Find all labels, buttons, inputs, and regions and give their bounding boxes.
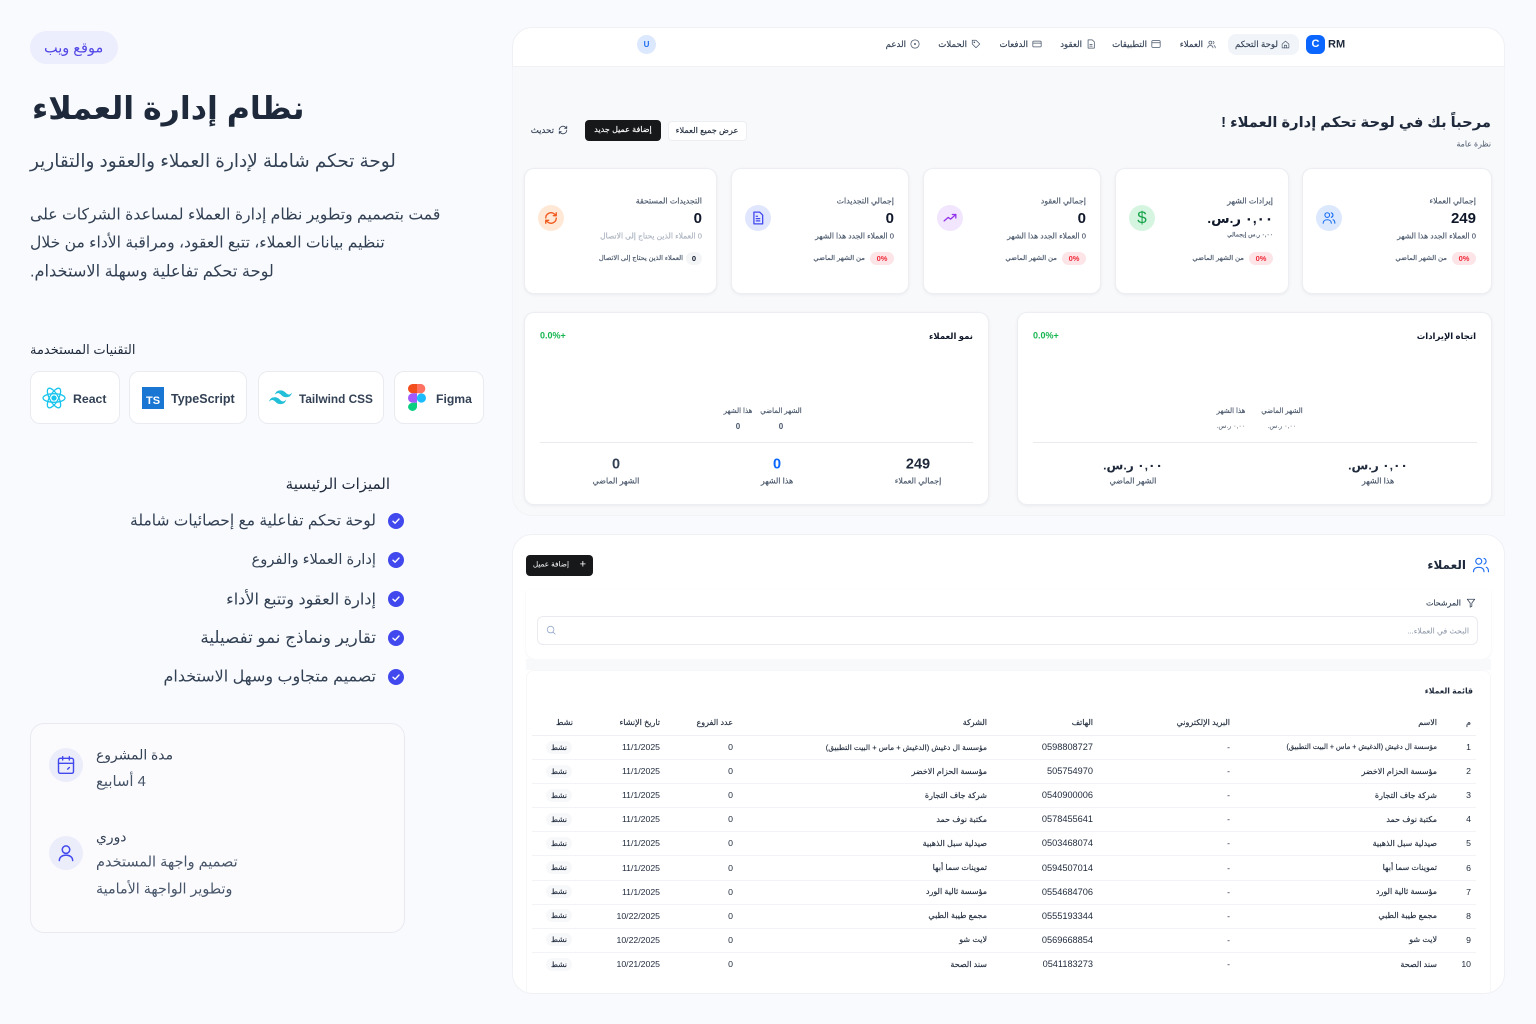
mini label: this month: هذا الشهر (1217, 408, 1245, 415)
mini value: last month: 0 (779, 422, 783, 431)
user avatar (637, 35, 656, 54)
icon: contract (1088, 40, 1095, 48)
change pill: 0% (1459, 254, 1469, 263)
nav: contracts: العقود (1060, 39, 1082, 49)
title: نظام إدارة العملاء (32, 90, 305, 126)
badge: website (30, 31, 118, 64)
feature 2 check (388, 552, 404, 568)
role label: دوري (96, 829, 126, 845)
filters card (526, 590, 1491, 659)
change pill (1452, 252, 1476, 265)
clients table: 0 (728, 766, 733, 776)
subtitle: لوحة تحكم شاملة لإدارة العملاء والعقود والتقارير (30, 150, 396, 171)
feature 4 check (388, 630, 404, 646)
mini label: this month: هذا الشهر (724, 408, 752, 415)
clients table: 0 (728, 863, 733, 873)
clients table: - (1227, 742, 1230, 752)
clients table: 0 (728, 790, 733, 800)
tech chip: Figma (394, 371, 484, 424)
feature 1 check (388, 513, 404, 529)
clients table: مؤسسة الحزام الاخضر (912, 767, 987, 776)
clients table: مؤسسة ثالية الورد (926, 887, 987, 896)
button: add client: إضافة عميل (533, 560, 569, 569)
feature 2: إدارة العملاء والفروع (252, 552, 376, 568)
clients table: - (1227, 911, 1230, 921)
feature 1: لوحة تحكم تفاعلية مع إحصائيات شاملة (130, 513, 376, 530)
note: العملاء الذين يحتاج إلى الاتصال (599, 255, 683, 262)
clients table: 0541183273 (1043, 959, 1093, 969)
clients table: 11/1/2025 (622, 887, 660, 897)
mini label: last month: الشهر الماضي (760, 408, 802, 415)
clients table: مؤسسة ال دغيش (الدغيش + ماس + البيت التطبيق) (826, 743, 987, 752)
clients table: تاريخ الإنشاء (620, 718, 660, 727)
this month value: 0 (773, 456, 781, 472)
clients table: تموينات سما أبها (933, 863, 987, 872)
clients table: 0569668854 (1042, 935, 1093, 945)
icon: TypeScript (142, 387, 164, 409)
clients table: نشط (551, 743, 567, 752)
search field (537, 616, 1478, 645)
nav: clients: العملاء (1180, 39, 1203, 49)
mini value: this month: 0 (736, 422, 740, 431)
chart card: revenue trend (1017, 312, 1492, 505)
icon: Figma (408, 384, 426, 411)
nav: payments: الدفعات (1000, 39, 1028, 49)
icon: filter (1466, 598, 1476, 608)
icon: dollar: $ (1137, 208, 1147, 227)
feature 3: إدارة العقود وتتبع الأداء (226, 590, 376, 608)
clients table: - (1227, 814, 1230, 824)
clients table: 11/1/2025 (622, 790, 660, 800)
heading: main features: الميزات الرئيسية (286, 476, 390, 493)
clients table: 0578455641 (1042, 814, 1093, 824)
clients table: - (1227, 766, 1230, 776)
change note: من الشهر الماضي (813, 255, 865, 262)
gap strip (526, 659, 1491, 670)
divider (1033, 442, 1477, 443)
clients table: 0 (728, 887, 733, 897)
clients table: الشركة (963, 718, 987, 727)
detail: 0 العملاء الجدد هذا الشهر (815, 231, 894, 240)
change note: من الشهر الماضي (1005, 255, 1057, 262)
panel: dashboard screenshot (512, 27, 1505, 516)
clients table: م (1466, 718, 1471, 727)
clients table: نشط (551, 960, 567, 969)
stat card: total renewals (731, 168, 909, 294)
description text (30, 207, 440, 280)
clients table: عدد الفروع (696, 718, 733, 727)
active nav pill (1228, 34, 1299, 55)
panel: project info (30, 723, 405, 933)
detail: 0 العملاء الجدد هذا الشهر (1007, 231, 1086, 240)
last month label: الشهر الماضي (593, 476, 639, 485)
tech chip: TypeScript: TypeScript (171, 392, 235, 406)
mini value: this month: ٠,٠٠ ر.س. (1217, 423, 1245, 430)
icon: dollar (1129, 205, 1155, 231)
clients table: نشط (556, 718, 573, 727)
icon: calendar (49, 748, 83, 782)
clients table: 0 (728, 959, 733, 969)
tech chip: React (30, 371, 120, 424)
icon: tag (972, 40, 980, 48)
clients table: 11/1/2025 (622, 863, 660, 873)
clients table: سند الصحة (1400, 960, 1437, 969)
clients table: 0 (728, 838, 733, 848)
clients table: 11/1/2025 (622, 814, 660, 824)
clients table (532, 718, 1476, 969)
role description: تصميم واجهة المستخدم (96, 854, 238, 870)
clients table: صيدلية سبل الذهبية (923, 839, 987, 848)
clients table: 7 (1466, 887, 1471, 897)
dashboard heading: مرحباً بك في لوحة تحكم إدارة العملاء ! (1221, 115, 1491, 131)
clients table: - (1227, 887, 1230, 897)
clients table: لايت شو (959, 935, 987, 944)
clients table: نشط (551, 815, 567, 824)
clients table: 10 (1461, 959, 1471, 969)
mini value: last month: ٠,٠٠ ر.س. (1268, 423, 1296, 430)
clients table: 0 (728, 814, 733, 824)
last month value: ٠,٠٠ ر.س. (1103, 459, 1163, 473)
this month value: ٠,٠٠ ر.س. (1348, 459, 1408, 473)
label: إجمالي العملاء (1429, 196, 1476, 205)
clients table: الاسم (1418, 718, 1437, 727)
clients table: 0555193344 (1042, 911, 1093, 921)
clients table: 0594507014 (1042, 863, 1093, 873)
feature list (130, 513, 404, 686)
description text: قمت بتصميم وتطوير نظام إدارة العملاء لمساعدة الشركات على (30, 207, 440, 224)
clients table: 505754970 (1047, 766, 1093, 776)
clients table: نشط (551, 935, 567, 944)
total value: 249 (906, 456, 930, 472)
logo: C (1312, 38, 1319, 50)
clients table: نشط (551, 911, 567, 920)
this month label: هذا الشهر (761, 476, 793, 485)
last month value: 0 (612, 456, 620, 472)
filters label: المرشحات (1426, 598, 1461, 607)
navigation bar (512, 27, 1505, 67)
divider (540, 442, 973, 443)
detail: ٠,٠٠ ر.س إيجمالي (1227, 232, 1273, 238)
clients table: - (1227, 959, 1230, 969)
clients table: نشط (551, 791, 567, 800)
stat card: total contracts (923, 168, 1101, 294)
label: إجمالي التجديدات (837, 196, 894, 205)
value: 0 (694, 210, 702, 227)
total label: إجمالي العملاء (895, 476, 941, 485)
logo (1306, 35, 1325, 54)
user avatar: U (644, 40, 649, 49)
nav: support: الدعم (886, 39, 906, 49)
clients table: 10/22/2025 (617, 935, 660, 945)
value: 0 (1078, 210, 1086, 227)
clients table: نشط (551, 839, 567, 848)
icon: home (1282, 40, 1290, 48)
detail: 0 العملاء الذين يحتاج إلى الاتصال (600, 231, 702, 240)
tech chip: React: React (73, 392, 106, 406)
feature 4: تقارير ونماذج نمو تفصيلية (200, 628, 376, 647)
count pill: 0 (692, 254, 696, 263)
change note: من الشهر الماضي (1395, 255, 1447, 262)
clients table: 11/1/2025 (622, 838, 660, 848)
icon: clients (1316, 205, 1342, 231)
clients table: نشط (551, 863, 567, 872)
last month label: الشهر الماضي (1110, 476, 1156, 485)
nav: apps: التطبيقات (1112, 39, 1147, 49)
icon: clients (1472, 558, 1490, 572)
count pill (686, 252, 702, 265)
value: 249 (1451, 210, 1476, 227)
chart card: client growth (524, 312, 989, 505)
change pill (1062, 252, 1086, 265)
icon: apps (1151, 40, 1161, 48)
button: view all clients (668, 121, 747, 141)
clients table: نشط (551, 887, 567, 896)
role description: وتطوير الواجهة الأمامية (96, 881, 232, 897)
clients table: 0 (728, 911, 733, 921)
section title: العملاء (1427, 558, 1466, 572)
nav: dashboard: لوحة التحكم (1235, 39, 1278, 49)
clients table: 11/1/2025 (622, 742, 660, 752)
nav: campaigns: الحملات (938, 39, 967, 49)
clients table: نشط (551, 767, 567, 776)
title: نمو العملاء (929, 331, 973, 341)
clients table: - (1227, 790, 1230, 800)
label: التجديدات المستحقة (636, 196, 702, 205)
list title: قائمة العملاء (1425, 686, 1473, 695)
dashboard subheading: نظرة عامة (1456, 139, 1491, 148)
growth percent: +0.0% (1033, 331, 1059, 341)
icon: search (546, 626, 556, 634)
clients table: 2 (1466, 766, 1471, 776)
clients table: سند الصحة (950, 960, 987, 969)
change pill: 0% (1069, 254, 1079, 263)
icon: user (49, 836, 83, 870)
feature 5 check (388, 669, 404, 685)
growth percent: +0.0% (540, 331, 566, 341)
icon: payment (1032, 40, 1042, 48)
button: add client: + (580, 558, 586, 570)
description text: لوحة تحكم تفاعلية وسهلة الاستخدام. (30, 262, 274, 280)
project duration label: مدة المشروع (96, 747, 173, 763)
tech chip: Tailwind CSS (258, 371, 384, 424)
clients table: مجمع طيبة الطبي (928, 911, 987, 920)
icon: React (42, 388, 66, 408)
clients table: مكتبة نوف حمد (936, 815, 987, 824)
clients table: 6 (1466, 863, 1471, 873)
description text: تنظيم بيانات العملاء، تتبع العقود، ومراقبة الأداء من خلال (30, 235, 385, 252)
clients table: 0 (728, 742, 733, 752)
clients table: شركة جاف التجارة (1375, 791, 1437, 800)
icon: support (910, 40, 920, 48)
tech chip: Tailwind CSS: Tailwind CSS (299, 392, 373, 406)
label: إيرادات الشهر (1227, 196, 1273, 205)
value: ٠,٠٠ ر.س. (1207, 211, 1273, 226)
button: refresh (531, 125, 568, 135)
role description (96, 854, 238, 897)
icon: trend (937, 205, 963, 231)
clients table: شركة جاف التجارة (925, 791, 987, 800)
clients table: لايت شو (1409, 935, 1437, 944)
clients table: 0540900006 (1042, 790, 1093, 800)
button: add client (526, 555, 593, 576)
clients table: 10/21/2025 (617, 959, 660, 969)
stat card: monthly revenue (1115, 168, 1289, 294)
clients table: 8 (1466, 911, 1471, 921)
mini label: last month: الشهر الماضي (1261, 408, 1303, 415)
change pill: 0% (1256, 254, 1266, 263)
logo text: RM (1328, 38, 1345, 50)
clients table: مؤسسة ال دغيش (الدغيش + ماس + البيت التطبيق) (1286, 744, 1437, 751)
clients table: 1 (1466, 742, 1471, 752)
clients table: 0598808727 (1042, 742, 1093, 752)
heading: technologies used: التقنيات المستخدمة (30, 342, 136, 357)
clients table: البريد الإلكتروني (1177, 718, 1230, 727)
change pill: 0% (877, 254, 887, 263)
clients table: - (1227, 863, 1230, 873)
tech chip: Figma: Figma (436, 392, 472, 406)
clients table: 10/22/2025 (617, 911, 660, 921)
detail: 0 العملاء الجدد هذا الشهر (1397, 231, 1476, 240)
button: add new client (585, 120, 661, 141)
clients table: - (1227, 935, 1230, 945)
clients table: صيدلية سبل الذهبية (1373, 839, 1437, 848)
clients table: مؤسسة الحزام الاخضر (1362, 767, 1437, 776)
change note: من الشهر الماضي (1192, 255, 1244, 262)
change pill (1249, 252, 1273, 265)
icon: document (745, 205, 771, 231)
icon: refresh (558, 126, 568, 134)
icon: renew (538, 205, 564, 231)
clients table: مجمع طيبة الطبي (1378, 911, 1437, 920)
clients table: 0554684706 (1042, 887, 1093, 897)
clients table: 0503468074 (1042, 838, 1093, 848)
clients table: تموينات سما أبها (1383, 863, 1437, 872)
feature 3 check (388, 591, 404, 607)
title: اتجاه الإيرادات (1417, 331, 1476, 341)
clients table: 11/1/2025 (622, 766, 660, 776)
button: view all clients: عرض جميع العملاء (676, 126, 738, 135)
button: add new client: إضافة عميل جديد (594, 125, 652, 134)
value: 0 (886, 210, 894, 227)
stat card: due renewals (524, 168, 717, 294)
clients table: الهاتف (1072, 718, 1093, 727)
search placeholder: البحث في العملاء... (1407, 626, 1469, 635)
clients table: 0 (728, 935, 733, 945)
stat card: total clients (1302, 168, 1492, 294)
clients table: 3 (1466, 790, 1471, 800)
icon: Tailwind (269, 390, 292, 404)
project duration value: 4 أسابيع (96, 774, 146, 790)
clients table: مكتبة نوف حمد (1386, 815, 1437, 824)
this month label: هذا الشهر (1362, 476, 1394, 485)
tech chip: TypeScript (129, 371, 247, 424)
badge: website: موقع ويب (44, 40, 103, 56)
clients table: 9 (1466, 935, 1471, 945)
clients table: - (1227, 838, 1230, 848)
change pill (870, 252, 894, 265)
clients table: 5 (1466, 838, 1471, 848)
refresh label: تحديث (531, 125, 554, 135)
icon: TypeScript: TS (146, 395, 160, 407)
clients table: 4 (1466, 814, 1471, 824)
icon: clients (1207, 40, 1216, 48)
feature 5: تصميم متجاوب وسهل الاستخدام (164, 668, 376, 685)
panel: clients section (512, 534, 1505, 994)
label: إجمالي العقود (1041, 196, 1086, 205)
table card outline (526, 670, 1491, 994)
clients table: مؤسسة ثالية الورد (1376, 887, 1437, 896)
